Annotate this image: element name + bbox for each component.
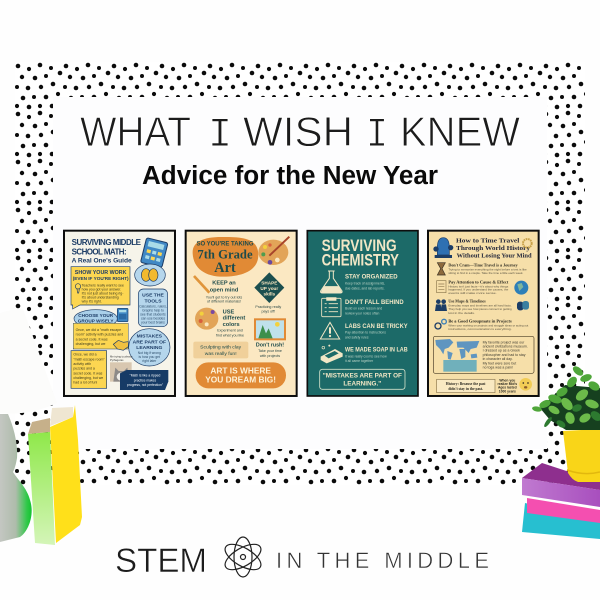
project story: no toga was a pain! xyxy=(483,365,513,369)
poster: 7th grade art xyxy=(186,231,297,396)
icon: warning triangle xyxy=(320,322,340,339)
icon: small calculator xyxy=(117,308,128,322)
tip: use different colors: different xyxy=(223,316,245,322)
favorite project panel xyxy=(433,336,534,373)
caption: practicing pays off: pays off! xyxy=(261,310,275,314)
section: don't fall behind: Build on each lesson and xyxy=(345,306,382,310)
callout: mistakes are part of learning: ARE PART OF xyxy=(133,339,166,345)
stacked books xyxy=(522,463,600,539)
tip: good groupmate: instructions, communication is everything. xyxy=(448,328,512,331)
art poster heading blob: 7th Grade xyxy=(197,248,253,262)
project story: My favorite project was our xyxy=(483,340,525,344)
callout: choose your group wisely xyxy=(74,310,117,328)
callout: mistakes are part of learning: MISTAKES xyxy=(137,334,163,340)
tip: good groupmate: When your working on projects and struggle ideas or acting out xyxy=(448,324,529,327)
icon: gear xyxy=(523,239,532,248)
lamp xyxy=(0,309,57,542)
tip: maps and timelines: They help you see how pieces connect to getting xyxy=(448,308,512,311)
tip: use different colors: Experiment and xyxy=(217,329,243,333)
tip: don't rush: Don't rush! xyxy=(256,342,284,348)
callout: escape room story: challenging, but we xyxy=(76,342,106,346)
section: labs can be tricky xyxy=(345,323,408,340)
section: stay organized: due dates, and lab reports. xyxy=(345,286,385,290)
history heading xyxy=(456,238,532,259)
callout: use the tools: Graphs help to xyxy=(142,309,164,313)
icon: atom xyxy=(221,537,265,577)
icon: hourglass xyxy=(437,263,445,275)
chemistry heading: SURVIVING xyxy=(322,236,397,255)
tip: use different colors: find what you like xyxy=(216,333,244,337)
logo: stem in the middle xyxy=(115,537,489,580)
title: I xyxy=(208,111,232,159)
callout: use the tools: your best brains xyxy=(141,321,165,325)
callout: escape room repeat: had a lot of fun! xyxy=(73,381,97,385)
subtitle: Advice for the New Year xyxy=(142,162,438,190)
side note xyxy=(497,379,517,394)
icon: calculator xyxy=(141,238,168,268)
tip: cause and effect: happened. If you understand the causes, the xyxy=(448,289,509,292)
project story: I dressed up as a Greek xyxy=(483,349,520,353)
poster: surviving middle school math xyxy=(64,231,175,396)
callout: show your work: It's not just about being rig- xyxy=(82,292,123,296)
tip: cause and effect: History isn't just facts—it's about why things xyxy=(448,285,509,288)
section: don't fall behind: review your notes often xyxy=(345,311,380,315)
icon: second palette xyxy=(195,308,218,330)
potted plant xyxy=(532,364,600,482)
icon: flask xyxy=(321,271,342,293)
callout: escape room repeat xyxy=(71,351,107,388)
logo: stem in the middle: STEM xyxy=(115,542,207,580)
icon: palette and brush xyxy=(258,237,289,265)
tip: don't cram: Trying to memorize everything the night before a test is like xyxy=(448,269,527,272)
callout: escape room repeat: puzzles and a xyxy=(73,367,95,371)
section: we made soap in lab: WE MADE SOAP IN LAB xyxy=(345,346,408,353)
project story: My feet were sore but xyxy=(483,361,516,365)
callout: escape room repeat: "math escape room" xyxy=(73,357,105,361)
icon: connected circles xyxy=(435,319,446,329)
quote box: "MISTAKES ARE PART OF xyxy=(323,373,402,380)
icon: paintbrush xyxy=(194,276,209,293)
icon: time machine xyxy=(433,238,453,258)
books: green and yellow xyxy=(28,405,82,545)
icon: brain in cloud xyxy=(135,264,165,286)
tip: don't cram: sitting to find in a couple. Take the time a little each week. xyxy=(448,272,524,275)
tip: good groupmate: Be a Good Groupmate in Projects xyxy=(448,320,512,324)
art poster heading blob xyxy=(193,237,258,277)
section: don't fall behind: DON'T FALL BEHIND xyxy=(345,299,404,306)
icon: landscape painting xyxy=(255,319,285,339)
math poster heading: SURVIVING MIDDLE xyxy=(72,238,142,247)
caption: practicing pays off: Practicing really xyxy=(255,305,281,309)
history heading: Through World History xyxy=(456,245,531,252)
icon: soap bar xyxy=(321,345,343,363)
tip: don't cram: Don't Cram—Time Travel is a Journey xyxy=(448,264,518,268)
icon: document xyxy=(437,281,446,293)
history joke box: didn't stay in the past. xyxy=(448,387,483,391)
tip: keep an open mind: You'll get to try out lots xyxy=(206,295,242,299)
callout: mistakes are part of learning: LEARNING xyxy=(136,345,162,351)
side note: realize Mid's xyxy=(497,382,517,386)
logo: stem in the middle: IN THE MIDDLE xyxy=(276,548,489,573)
badge: shape up your skills: SHAPE xyxy=(261,280,277,285)
tip: keep an open mind: of different materials! xyxy=(207,300,241,304)
callout: escape room story xyxy=(73,323,128,349)
title: WHAT xyxy=(80,108,191,155)
callout: use the tools: can use besides xyxy=(141,317,165,321)
cat photo with caption xyxy=(110,355,133,382)
callout: mistakes are part of learning: right later xyxy=(142,359,157,363)
tip: use different colors xyxy=(216,310,245,337)
section: we made soap in lab: It was really cool to see how xyxy=(345,354,387,358)
badge: shape up your skills: skills xyxy=(263,292,276,297)
history heading: How to Time Travel xyxy=(456,238,519,245)
art poster heading blob: Art xyxy=(214,260,236,276)
poster: time travel through world history xyxy=(428,231,539,396)
tip: don't rush: Take your time xyxy=(258,349,282,353)
badge: shape up your skills xyxy=(254,272,284,303)
side note: 1000 years xyxy=(499,390,516,394)
cat photo with caption: Pythagoras xyxy=(110,358,124,362)
section: labs can be tricky: LABS CAN BE TRICKY xyxy=(345,323,408,330)
banner: art is where you dream big xyxy=(196,362,286,388)
history joke box: History: Because the past xyxy=(446,382,486,386)
side note: When you xyxy=(499,379,515,383)
tip: maps and timelines: Use Maps & Timelines xyxy=(448,300,486,304)
quote banner: progress, not perfection" xyxy=(127,383,164,387)
callout: use the tools: TOOLS xyxy=(144,298,162,304)
section: labs can be tricky: Pay attention to instructions xyxy=(345,331,386,335)
chemistry heading: CHEMISTRY xyxy=(322,251,399,270)
callout: escape room repeat: challenging, but we xyxy=(73,376,103,380)
callout: show your work: how you got your answer. xyxy=(82,288,121,292)
section: stay organized: STAY ORGANIZED xyxy=(345,274,398,281)
chemistry heading xyxy=(322,236,399,270)
polka dot border xyxy=(15,62,585,485)
project story: ancient civilizations museum. xyxy=(483,344,528,348)
math poster heading: A Real One's Guide xyxy=(72,257,132,264)
side note: Ages lasted xyxy=(498,386,517,390)
tip: don't rush: with projects xyxy=(260,354,280,358)
callout: escape room story: Once, we did a "math escape xyxy=(76,328,121,332)
callout: escape room repeat: activity with xyxy=(73,362,91,366)
tip: keep an open mind: KEEP an xyxy=(212,281,236,287)
art poster heading blob: SO YOU'RE TAKING xyxy=(196,242,254,248)
tip: keep an open mind: open mind xyxy=(210,287,239,293)
callout: sculpting with clay xyxy=(193,342,248,358)
callout: escape room repeat: secret code. It was xyxy=(73,371,103,375)
callout: choose your group wisely: GROUP WISELY xyxy=(78,318,114,323)
quote banner xyxy=(120,370,168,390)
callout: use the tools: USE THE xyxy=(142,293,164,299)
callout: show your work: SHOW YOUR WORK xyxy=(75,270,127,276)
icon: people silhouettes xyxy=(435,299,447,311)
tip: cause and effect xyxy=(448,280,509,295)
callout: escape room story: a secret code. It was xyxy=(76,337,108,341)
callout: show your work xyxy=(71,267,130,309)
callout: mistakes are part of learning: Not big if wrong xyxy=(138,351,161,355)
callout: show your work: Teachers really want to see xyxy=(82,284,124,288)
section: we made soap in lab xyxy=(345,346,408,363)
tip: maps and timelines: lost in the details. xyxy=(448,312,475,315)
title: WISH xyxy=(243,108,353,155)
callout: use the tools xyxy=(138,289,168,327)
caption: practicing pays off xyxy=(255,305,281,314)
callout: sculpting with clay: Sculpting with clay xyxy=(200,345,242,351)
history joke box xyxy=(437,379,495,393)
callout: choose your group wisely: CHOOSE YOUR xyxy=(78,313,114,318)
icon: handshake xyxy=(113,340,128,350)
icon: theatre masks xyxy=(517,301,529,310)
world map xyxy=(435,339,479,360)
callout: show your work: why it's right. xyxy=(82,300,102,304)
tip: maps and timelines: Everyday maps and timelines are all hard facts. xyxy=(448,305,512,308)
icon: globe xyxy=(514,281,528,295)
project story: philosopher and had to stay xyxy=(483,353,526,357)
poster: surviving chemistry xyxy=(307,231,418,396)
project story xyxy=(483,340,528,369)
callout: use the tools: see that students xyxy=(140,313,166,317)
tip: cause and effect: events will make more sense. xyxy=(448,292,497,295)
callout: show your work: It's about understanding xyxy=(82,296,119,300)
quote banner: practice makes xyxy=(134,378,157,382)
icon: emoji face xyxy=(519,378,532,391)
callout: mistakes are part of learning: is how you get xyxy=(139,355,160,359)
title: KNEW xyxy=(400,108,520,155)
quote banner: "Math is like a ripped xyxy=(130,374,161,378)
tip: use different colors: USE xyxy=(223,310,235,316)
tip: maps and timelines xyxy=(448,300,512,315)
tip: use different colors: colors xyxy=(223,322,240,328)
callout: mistakes are part of learning xyxy=(129,329,170,366)
project story: in character all day. xyxy=(483,357,513,361)
teal map inset xyxy=(443,360,477,372)
tip: don't cram xyxy=(448,264,527,275)
callout: escape room repeat: Once, we did a xyxy=(73,353,97,357)
quote box xyxy=(320,369,405,389)
yellow pot xyxy=(563,429,600,482)
section: don't fall behind xyxy=(345,299,404,315)
plant foliage xyxy=(532,364,600,430)
section: we made soap in lab: it all came together xyxy=(345,359,374,363)
title: I xyxy=(366,111,388,159)
math poster heading xyxy=(72,238,142,264)
section: stay organized xyxy=(345,274,398,290)
callout: use the tools: Calculators, rulers, xyxy=(139,305,167,309)
cat photo with caption: Me trying to please xyxy=(110,355,133,359)
banner: art is where you dream big: ART IS WHERE xyxy=(210,365,271,375)
tip: don't rush xyxy=(256,342,284,358)
math poster heading: SCHOOL MATH: xyxy=(72,247,127,256)
banner: art is where you dream big: YOU DREAM BIG! xyxy=(205,375,276,385)
title xyxy=(80,108,520,159)
callout: sculpting with clay: was really fun! xyxy=(205,351,237,357)
icon: clipboard xyxy=(322,298,341,317)
section: labs can be tricky: and safety rules xyxy=(345,336,369,340)
tip: good groupmate xyxy=(448,320,529,331)
tip: cause and effect: Pay Attention to Cause & Effect xyxy=(448,280,509,284)
tip: keep an open mind xyxy=(206,281,242,304)
badge: shape up your skills: UP your xyxy=(260,286,278,291)
callout: show your work: (EVEN IF YOU'RE RIGHT) xyxy=(73,276,129,281)
callout: escape room story: room" activity with puzzles and xyxy=(76,333,123,337)
history heading: Without Losing Your Mind xyxy=(457,253,532,259)
quote box: LEARNING." xyxy=(343,380,381,387)
section: stay organized: Keep track of assignments, xyxy=(345,282,385,286)
